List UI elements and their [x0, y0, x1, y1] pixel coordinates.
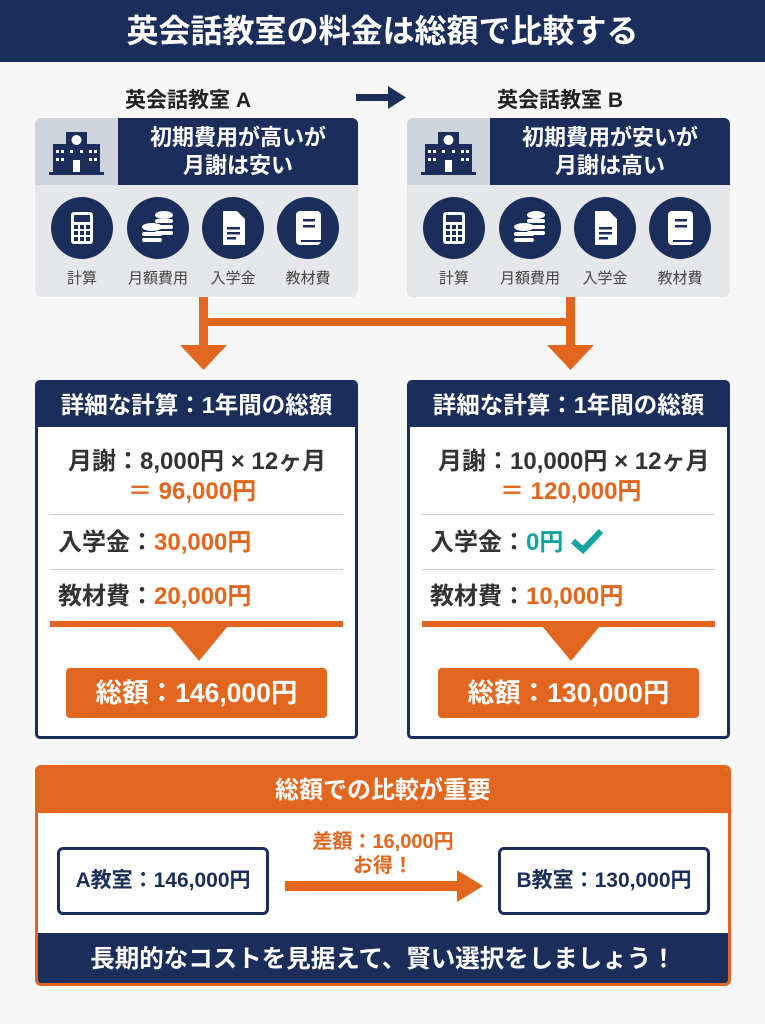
total B: 総額：130,000円 — [468, 678, 669, 708]
icon: coins — [127, 197, 189, 259]
total B — [438, 668, 699, 718]
row: tuition: ＝ 120,000円 — [500, 478, 641, 505]
box: B total — [498, 847, 710, 915]
icon labels: 計算 — [439, 270, 469, 287]
heading: class B: 英会話教室 B — [497, 89, 623, 112]
box: A total: A教室：146,000円 — [75, 869, 251, 892]
row: entrance fee: 入学金：30,000円 — [58, 529, 251, 556]
icon: document — [574, 197, 636, 259]
footer message — [38, 933, 728, 986]
row: materials: 教材費：10,000円 — [430, 583, 623, 610]
panel header text: 初期費用が高いが — [150, 125, 326, 150]
icon: building — [407, 118, 490, 185]
panel: class B summary — [407, 118, 730, 297]
arrow: comparison — [285, 870, 483, 902]
text: 教材費 — [285, 270, 330, 287]
title: 英会話教室の料金は総額で比較する — [126, 13, 638, 49]
icon: building — [35, 118, 118, 185]
panel: class A summary — [35, 118, 358, 297]
row: materials: 教材費：20,000円 — [58, 583, 251, 610]
text: 月額費用 — [128, 270, 188, 287]
row: entrance fee with check: 入学金：0円 — [430, 529, 563, 556]
footer message: 長期的なコストを見据えて、賢い選択をしましょう！ — [90, 946, 676, 973]
text: 月額費用 — [500, 270, 560, 287]
icon: coins — [499, 197, 561, 259]
orange bar with arrow — [422, 621, 715, 661]
difference text: お得！ — [353, 855, 413, 877]
icon: calculator — [51, 197, 113, 259]
icon: book — [277, 197, 339, 259]
row: tuition — [68, 448, 326, 505]
text: 入学金 — [582, 270, 628, 287]
row: tuition — [438, 448, 709, 505]
panel header text: 初期費用が安いが — [522, 125, 698, 150]
row: tuition: 月謝：8,000円 × 12ヶ月 — [68, 448, 326, 475]
text: 教材費 — [657, 270, 702, 287]
text: 入学金 — [210, 270, 256, 287]
difference text — [312, 830, 454, 877]
panel: detail A — [35, 380, 358, 739]
comparison header — [38, 768, 728, 813]
panel header text: 月謝は高い — [555, 153, 665, 178]
panel header text — [490, 118, 730, 185]
heading: class A: 英会話教室 A — [125, 89, 251, 112]
orange bar with arrow — [50, 621, 343, 661]
total A: 総額：146,000円 — [96, 678, 297, 708]
panel header text — [118, 118, 358, 185]
box: B total: B教室：130,000円 — [516, 869, 692, 892]
row: tuition: ＝ 96,000円 — [128, 478, 256, 505]
icon row B — [423, 197, 711, 287]
panel header text: 月謝は安い — [183, 153, 293, 178]
title — [0, 0, 765, 62]
difference text: 差額：16,000円 — [312, 831, 454, 853]
detail header — [410, 383, 727, 427]
panel: comparison — [35, 765, 731, 986]
icon: document — [202, 197, 264, 259]
detail header: 詳細な計算：1年間の総額 — [433, 392, 704, 418]
arrows: connectors — [180, 297, 594, 370]
detail header: 詳細な計算：1年間の総額 — [61, 392, 332, 418]
panel: detail B — [407, 380, 730, 739]
row: tuition: 月謝：10,000円 × 12ヶ月 — [438, 448, 709, 475]
comparison header: 総額での比較が重要 — [275, 777, 491, 804]
icon row A — [51, 197, 339, 287]
icon: calculator — [423, 197, 485, 259]
detail header — [38, 383, 355, 427]
total A — [66, 668, 327, 718]
icon labels: 計算 — [67, 270, 97, 287]
icon: book — [649, 197, 711, 259]
arrow: A to B — [356, 86, 406, 109]
box: A total — [57, 847, 269, 915]
